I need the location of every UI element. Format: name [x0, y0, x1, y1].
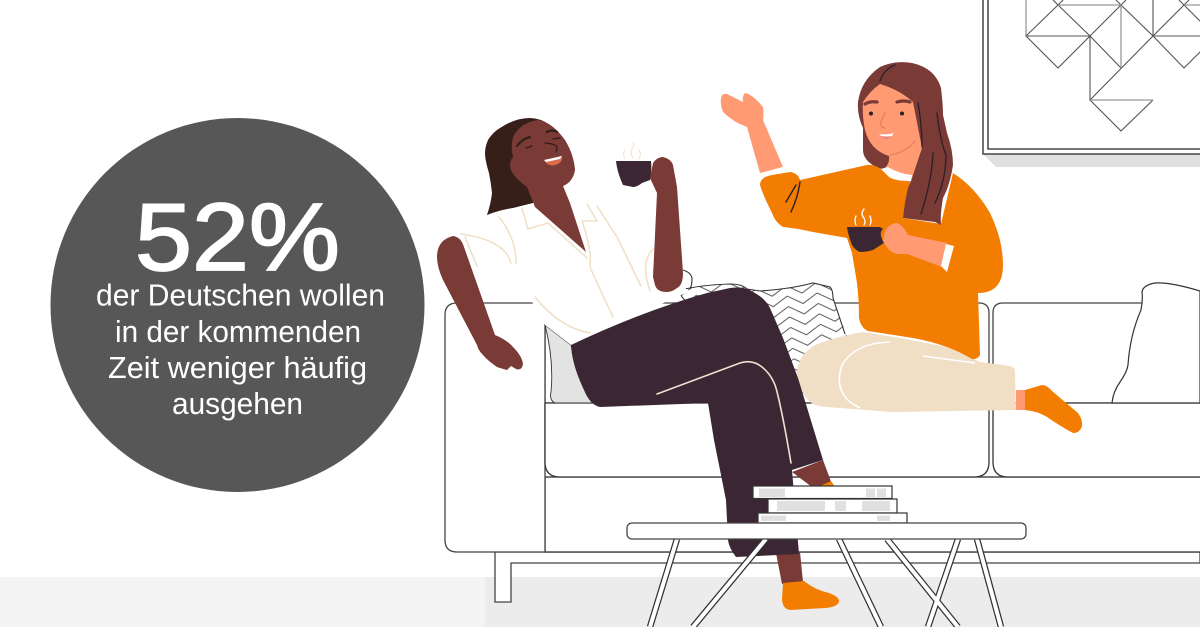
dark coffee cup — [847, 227, 884, 252]
back sock — [820, 481, 836, 488]
sleeve cuff — [941, 244, 954, 272]
coffee table — [627, 523, 1026, 627]
trouser creases — [839, 342, 975, 408]
orange sweater — [760, 165, 1003, 359]
book middle — [768, 499, 897, 513]
caption: der Deutschen wollen — [96, 278, 385, 312]
sweater collar — [881, 167, 912, 181]
laughing face details — [517, 130, 562, 165]
forearm and hand — [883, 223, 947, 267]
back ankle — [792, 460, 833, 487]
headline number: 52% — [135, 184, 340, 291]
sofa pillow right — [1112, 283, 1200, 403]
steam — [855, 209, 871, 225]
framed geometric picture — [983, 0, 1200, 167]
facial features — [865, 101, 915, 155]
front ankle — [776, 552, 803, 584]
sofa leg and rail — [495, 552, 1200, 602]
left arm — [437, 236, 523, 370]
sofa seat cushion left — [545, 403, 989, 477]
white blouse — [461, 205, 690, 345]
long brown hair — [858, 62, 953, 225]
sofa base — [545, 477, 1200, 552]
blouse seams — [461, 204, 653, 333]
patterned cushions — [681, 270, 848, 402]
statistic circle — [50, 118, 424, 492]
table legs — [650, 539, 1001, 627]
trousers — [797, 332, 1016, 412]
caption: in der kommenden — [115, 314, 361, 349]
trouser crease — [657, 362, 791, 463]
orange sock — [1025, 385, 1082, 433]
head and neck — [510, 120, 586, 252]
book bottom — [758, 513, 907, 523]
ankle — [1016, 390, 1026, 410]
floor — [0, 577, 1200, 627]
white cuff — [761, 167, 790, 177]
raised arm — [721, 93, 783, 173]
sleeve folds — [786, 182, 800, 212]
caption — [96, 278, 385, 421]
woman left — [437, 118, 839, 610]
grey shadow behind woman — [545, 325, 596, 403]
face and neck — [863, 84, 922, 181]
raised arm — [650, 157, 683, 292]
sofa back cushion left — [545, 303, 989, 403]
woman right — [721, 62, 1082, 433]
book top — [753, 486, 892, 498]
sofa — [445, 283, 1200, 602]
shoulder over hair — [855, 165, 892, 186]
stacked books — [753, 486, 907, 523]
caption: Zeit weniger häufig — [108, 350, 367, 385]
steam — [624, 143, 640, 159]
caption: ausgehen — [172, 386, 303, 421]
front sock — [782, 581, 839, 610]
dark coffee cup — [616, 161, 651, 187]
sofa seat cushion right — [993, 403, 1200, 477]
table top — [627, 523, 1026, 539]
sofa back cushion right — [993, 303, 1200, 403]
hair strands — [880, 65, 946, 214]
long dark hair — [485, 118, 550, 215]
sofa left arm — [445, 303, 545, 552]
dark trousers — [571, 288, 823, 557]
